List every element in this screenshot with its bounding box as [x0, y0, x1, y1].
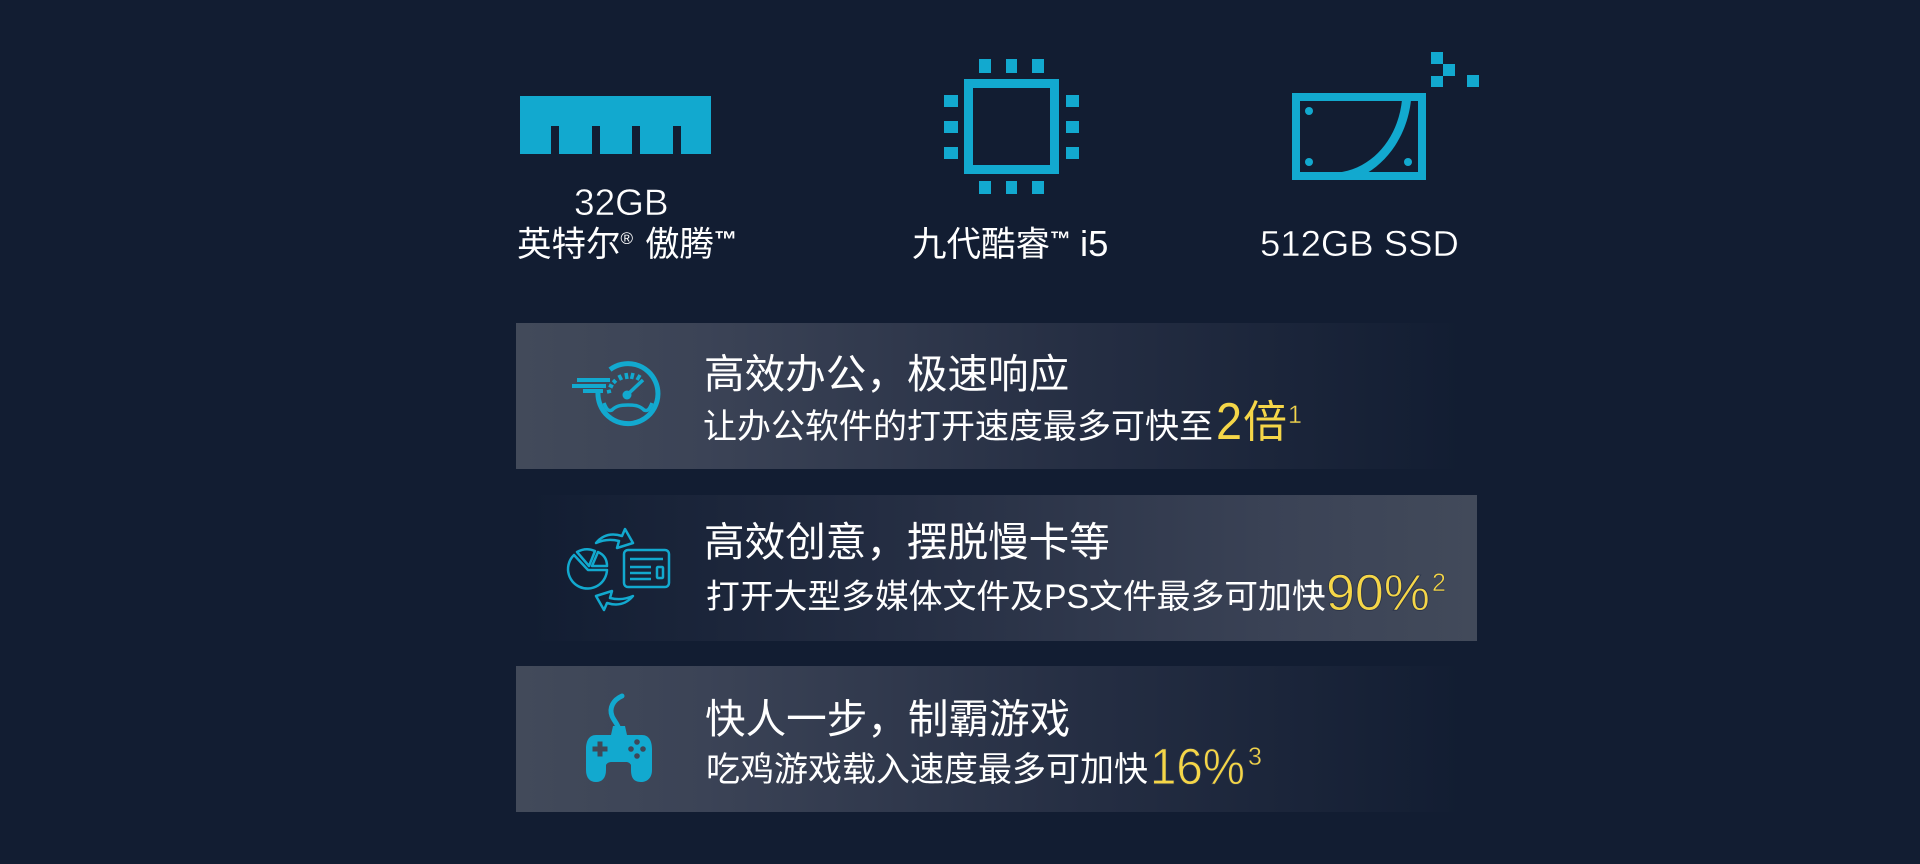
processor label: 九代酷睿 [912, 226, 1050, 264]
icon: memory module [520, 96, 711, 154]
panel background [530, 495, 1477, 641]
benefit text: 打开大型多媒体文件及PS文件最多可加快 [706, 578, 1326, 616]
icon: CPU chip [944, 59, 1079, 194]
spec: memory [517, 96, 737, 264]
highlight value: 90% [1326, 564, 1430, 621]
highlight value: 倍 [1243, 398, 1287, 447]
footnote mark: 3 [1248, 743, 1262, 771]
memory label: 32GB [574, 182, 669, 223]
memory label: 英特尔 [517, 226, 620, 264]
footnote mark: 2 [1432, 569, 1446, 597]
spec: processor [912, 59, 1108, 264]
highlight value [1216, 393, 1287, 451]
panel: gaming [516, 666, 1462, 812]
highlight value: 16% [1150, 738, 1245, 795]
storage label: 512GB SSD [1260, 223, 1459, 264]
heading: 快人一步，制霸游戏 [705, 686, 1070, 745]
footnote mark: 1 [1288, 401, 1302, 429]
icon: game controller [586, 696, 652, 782]
benefit text: 让办公软件的打开速度最多可快至 [703, 408, 1213, 446]
heading: 高效创意，摆脱慢卡等 [704, 509, 1110, 568]
panel: office efficiency [516, 323, 1462, 469]
memory label: ™ [714, 226, 737, 252]
memory label [517, 182, 737, 264]
spec: storage [1260, 52, 1479, 264]
heading: 高效办公，极速响应 [704, 341, 1069, 400]
processor label: ™ [1050, 228, 1071, 251]
memory label: 傲腾 [645, 226, 714, 264]
memory label: ® [620, 229, 634, 248]
processor label: i5 [1080, 223, 1108, 264]
icon: pie chart and document exchange [568, 529, 669, 610]
panel background [516, 323, 1462, 469]
highlight value: 2 [1216, 393, 1242, 451]
icon: speedometer [572, 364, 658, 424]
benefit text: 吃鸡游戏载入速度最多可加快 [706, 751, 1148, 789]
panel: creative efficiency [530, 495, 1477, 641]
panel background [516, 666, 1462, 812]
icon: solid state drive [1292, 52, 1479, 180]
